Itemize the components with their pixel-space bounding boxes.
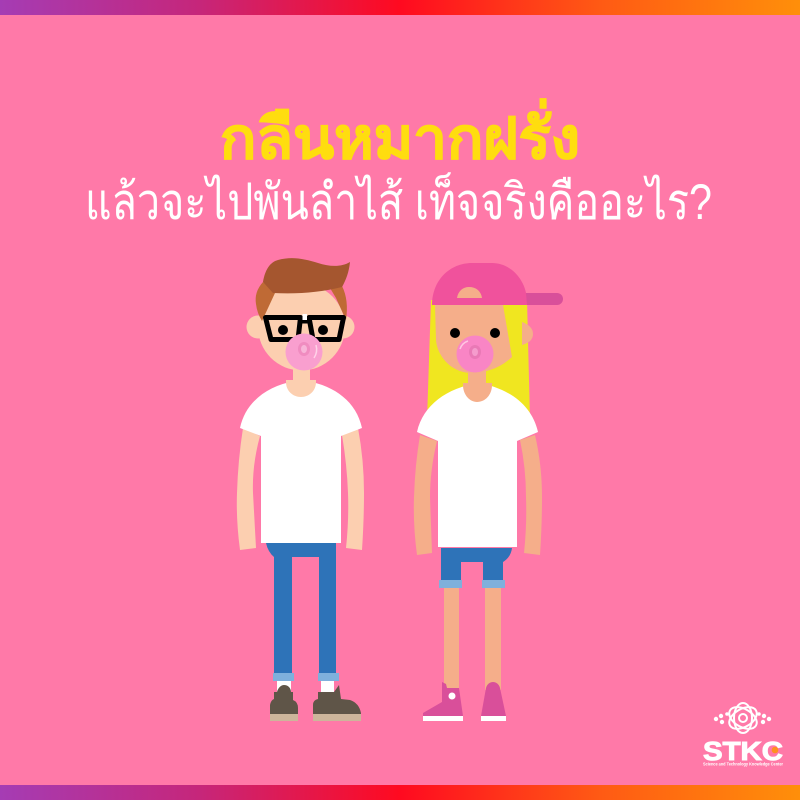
boy glasses: [266, 318, 344, 340]
girl shorts cuffs: [439, 580, 505, 588]
boy head: [258, 284, 345, 370]
logo wordmark: STKC: [703, 736, 783, 766]
logo atom icon: [726, 703, 760, 733]
girl bubble gum: [456, 336, 494, 372]
character: girl: [414, 263, 563, 690]
boy hair: [256, 258, 350, 321]
socks: [277, 681, 334, 693]
title line 1: กลืนหมากฝรั่ง: [220, 98, 580, 171]
shoes: [423, 682, 506, 716]
girl legs: [444, 585, 501, 690]
logo tagline: Science and Technology Knowledge Center: [703, 762, 783, 766]
boy neck: [286, 365, 316, 397]
logo: STKC: [703, 703, 783, 766]
shoe eyelet: [448, 692, 456, 700]
boy arms: [237, 428, 364, 550]
girl shirt: [417, 383, 538, 547]
boy eyes: [278, 325, 328, 335]
girl shorts: [441, 548, 512, 580]
top gradient bar: [0, 0, 800, 15]
boy ears: [246, 316, 354, 338]
girl arms: [414, 435, 542, 555]
girl cap opening: [457, 287, 482, 298]
girl feet: [423, 682, 506, 721]
boy feet: [270, 673, 361, 721]
boy shirt: [240, 380, 362, 543]
boy bubble gum: [286, 334, 322, 370]
girl cap: [432, 263, 527, 305]
girl ear: [522, 322, 533, 345]
soles: [270, 714, 361, 721]
cuffs: [273, 673, 339, 681]
logo dots: [714, 712, 771, 724]
girl hair: [427, 300, 530, 420]
bottom gradient bar: [0, 785, 800, 800]
shoes: [270, 685, 361, 714]
girl cap brim: [515, 293, 563, 305]
logo orange dot: [772, 747, 778, 753]
character: boy: [237, 258, 364, 673]
girl eyes: [450, 328, 500, 338]
girl face: [435, 305, 512, 373]
soles: [423, 716, 506, 721]
girl neck: [463, 365, 492, 402]
boy trousers: [266, 543, 336, 673]
title: [85, 98, 712, 230]
